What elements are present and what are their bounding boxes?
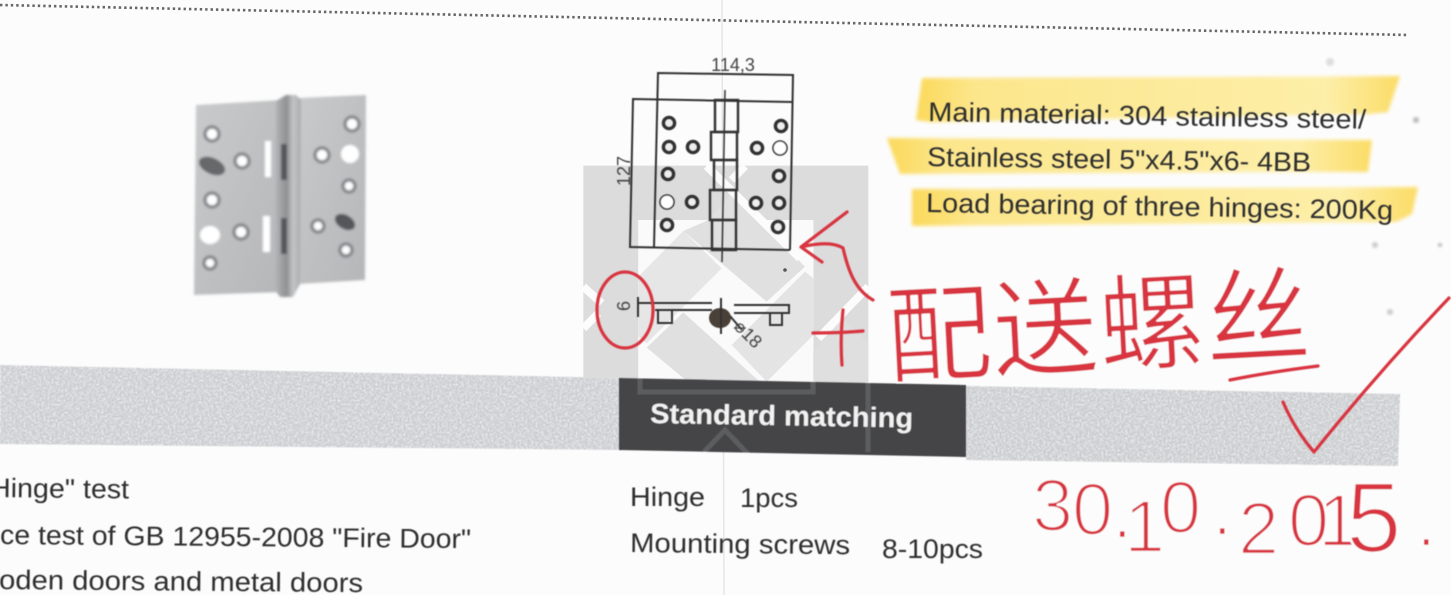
specification text: Load bearing of three hinges: 200Kg [926, 188, 1393, 225]
text block: standard matching list: Hinge [630, 482, 705, 512]
text block: test notes: ce test of GB 12955-2008 "Fire Door" [0, 520, 471, 554]
text block: standard matching list: 1pcs [740, 483, 798, 513]
panel: highlighted specification [887, 76, 1418, 226]
arrow pointing at drawing [801, 212, 873, 300]
annotation: red handwriting [597, 212, 1449, 574]
text block: standard matching list: Mounting screws [630, 528, 850, 560]
icon: check mark [1283, 298, 1449, 452]
scanner specks [1326, 58, 1442, 315]
yellow highlighter strokes [887, 76, 1418, 226]
hinge knuckles [710, 90, 738, 262]
icon: hinge photograph [194, 95, 366, 297]
handwritten note: 配送螺丝 [882, 230, 1314, 406]
panel: grey section bands [0, 365, 1400, 466]
icon: red circle around dimension 6 [597, 272, 653, 348]
specification text: Stainless steel 5"x4.5"x6- 4BB [927, 142, 1311, 177]
plus sign [813, 310, 863, 365]
dimension 114,3 [654, 55, 793, 250]
dimension 114,3: 114,3 [711, 55, 755, 75]
specification text: Main material: 304 stainless steel/ [928, 97, 1367, 135]
panel: Standard matching heading [619, 378, 966, 457]
panel: watermark [583, 166, 868, 385]
handwritten date: 30.10.201 [1032, 464, 1359, 570]
panel: Standard matching heading: Standard matching [650, 398, 913, 434]
chart: hinge technical drawing [614, 55, 793, 352]
side view of hinge: ⌀18 [730, 316, 766, 352]
handwritten date: 5 [1346, 462, 1402, 574]
specification text [926, 97, 1393, 225]
underline [1230, 366, 1318, 380]
text block: standard matching list: 8-10pcs [882, 534, 983, 564]
handwritten date: . [1416, 479, 1437, 562]
text block: test notes [0, 473, 471, 595]
screw holes [660, 118, 787, 232]
dimension 127 [614, 99, 792, 250]
side view of hinge [614, 297, 789, 352]
text block: standard matching list [630, 482, 983, 564]
dimension 127: 127 [614, 156, 634, 186]
side view of hinge: 6 [614, 301, 634, 311]
